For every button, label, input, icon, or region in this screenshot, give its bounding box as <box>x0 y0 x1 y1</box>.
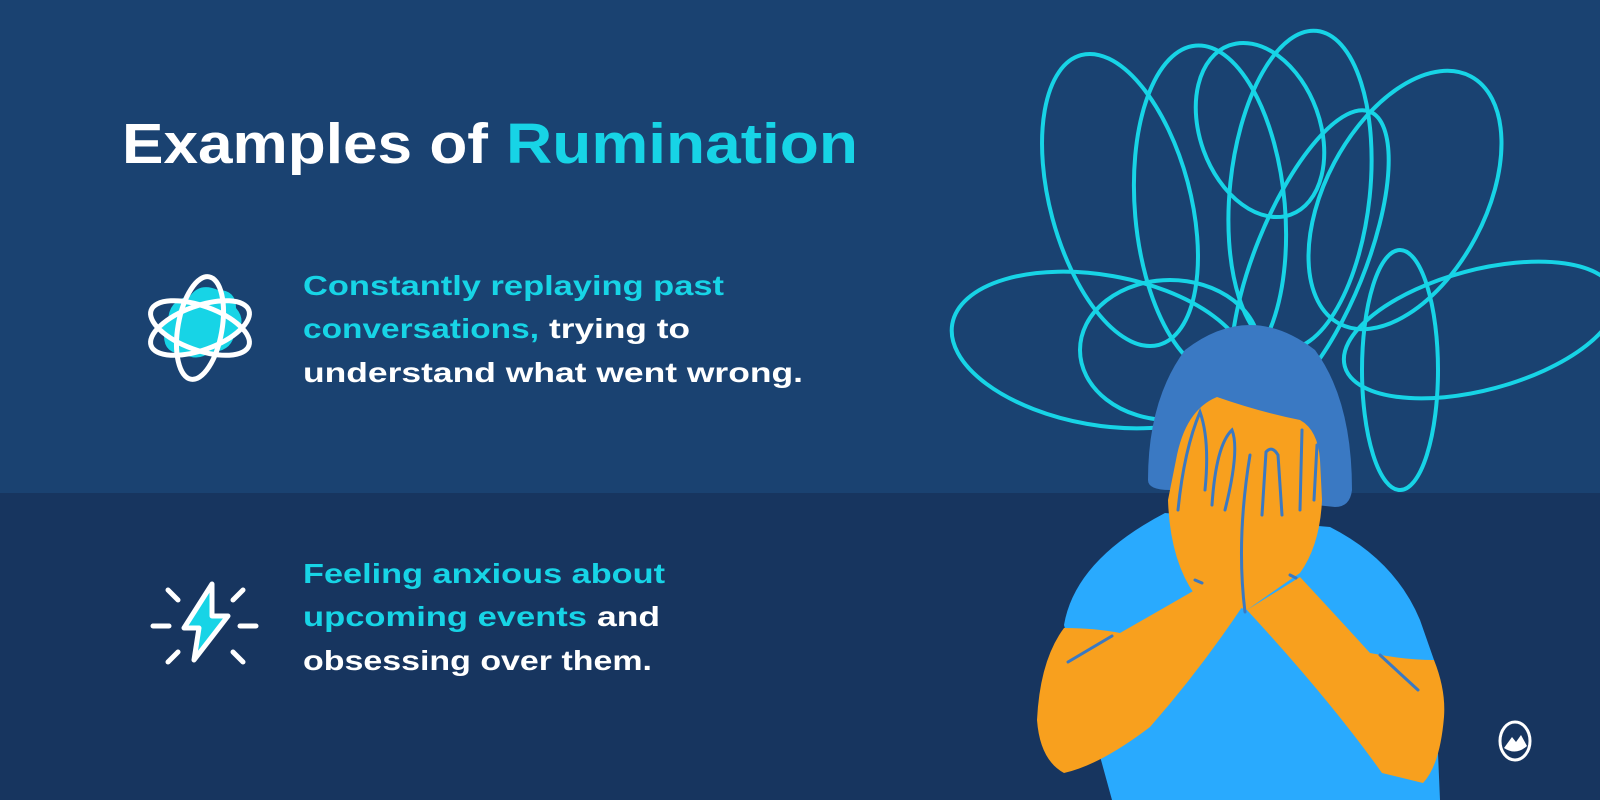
title: Examples of <box>122 112 489 176</box>
shirt <box>1064 513 1440 800</box>
logo <box>1500 722 1530 760</box>
text block: replaying conversations: understand what went wrong. <box>303 357 803 388</box>
text block: replaying conversations: Constantly replaying past <box>303 270 724 301</box>
illustration: scribbles <box>939 24 1600 490</box>
text block: anxious about events: Feeling anxious about <box>303 558 665 589</box>
text block: anxious about events: obsessing over them. <box>303 645 652 676</box>
hands <box>1168 397 1322 610</box>
text block: replaying conversations: conversations, <box>303 313 539 344</box>
icon: lightning bolt <box>153 584 256 662</box>
title: Rumination <box>506 112 858 176</box>
arms <box>1037 590 1242 773</box>
illustration: person covering face <box>1037 325 1444 800</box>
text block: anxious about events <box>303 558 665 676</box>
text block: anxious about events: and <box>597 601 660 632</box>
text block: replaying conversations <box>303 270 803 388</box>
hair <box>1148 325 1352 507</box>
icon: brain atom <box>144 273 256 383</box>
title <box>122 112 858 176</box>
text block: anxious about events: upcoming events <box>303 601 587 632</box>
text block: replaying conversations: trying to <box>549 313 690 344</box>
